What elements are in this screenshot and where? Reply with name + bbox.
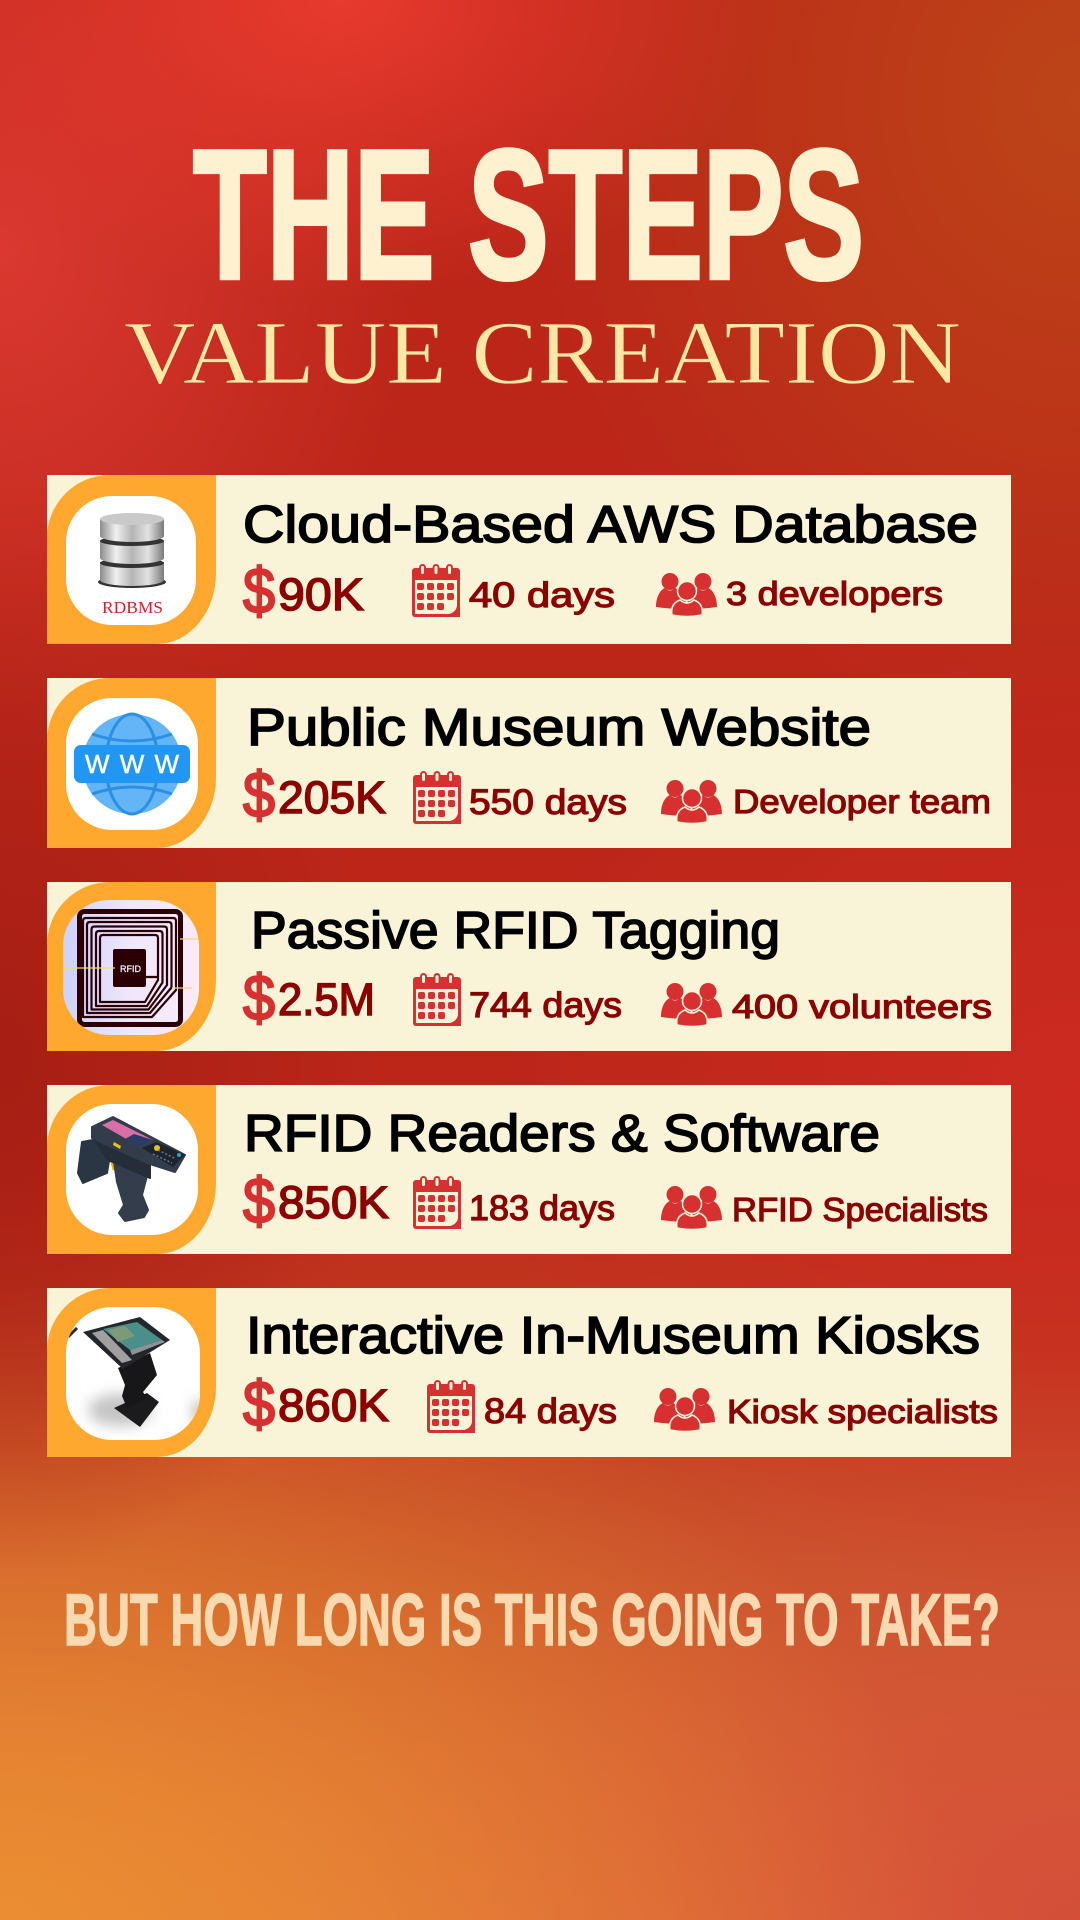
cost bbox=[243, 962, 375, 1034]
duration: 744 days bbox=[469, 986, 622, 1025]
cost bbox=[243, 759, 386, 831]
cost: 860K bbox=[278, 1380, 389, 1431]
icon: people bbox=[661, 1186, 722, 1230]
team: RFID Specialists bbox=[732, 1191, 988, 1228]
icon: handheld RFID reader bbox=[78, 1117, 185, 1221]
cost: $ bbox=[243, 555, 275, 627]
icon: RFID tag: RFID bbox=[120, 964, 141, 975]
panel: Public Museum Website bbox=[47, 678, 1011, 848]
icon: database: RDBMS bbox=[102, 598, 163, 617]
icon: touch kiosk bbox=[68, 1317, 207, 1427]
panel: Interactive In-Museum Kiosks bbox=[47, 1288, 1011, 1457]
team: 3 developers bbox=[726, 575, 943, 612]
team: Kiosk specialists bbox=[727, 1393, 998, 1430]
subtitle: VALUE CREATION bbox=[124, 304, 961, 403]
icon: globe www bbox=[74, 714, 190, 814]
cost bbox=[243, 1165, 389, 1237]
team: Developer team bbox=[733, 783, 991, 820]
icon: calendar bbox=[413, 1176, 461, 1229]
panel: Passive RFID Tagging bbox=[47, 882, 1011, 1051]
duration: 84 days bbox=[484, 1392, 617, 1431]
heading: Passive RFID Tagging bbox=[251, 902, 780, 960]
icon: RFID tag bbox=[63, 900, 199, 1035]
cost: $ bbox=[243, 962, 275, 1034]
icon: calendar bbox=[412, 564, 460, 617]
cost: $ bbox=[243, 1165, 275, 1237]
panel: Cloud-Based AWS Database bbox=[47, 475, 1011, 644]
cost: 2.5M bbox=[278, 974, 375, 1025]
icon: people bbox=[661, 983, 722, 1026]
icon: people bbox=[654, 1388, 715, 1432]
cost: 205K bbox=[278, 772, 386, 823]
icon: calendar bbox=[413, 771, 461, 824]
icon: globe www: WWW bbox=[85, 749, 179, 779]
icon: database bbox=[98, 513, 166, 617]
heading: Cloud-Based AWS Database bbox=[243, 496, 978, 554]
cost: 850K bbox=[278, 1177, 389, 1228]
duration: 183 days bbox=[469, 1189, 615, 1228]
panel: RFID Readers & Software bbox=[47, 1085, 1011, 1254]
duration: 40 days bbox=[469, 576, 615, 615]
cost: 90K bbox=[278, 569, 364, 620]
icon: calendar bbox=[427, 1380, 475, 1433]
icon: calendar bbox=[413, 973, 461, 1026]
cost: $ bbox=[243, 1368, 275, 1440]
heading: Interactive In-Museum Kiosks bbox=[246, 1307, 980, 1365]
icon: people bbox=[661, 780, 722, 824]
cost bbox=[243, 1368, 389, 1440]
heading: RFID Readers & Software bbox=[244, 1105, 880, 1163]
heading: Public Museum Website bbox=[247, 699, 871, 757]
cost: $ bbox=[243, 759, 275, 831]
cost bbox=[243, 555, 364, 627]
duration: 550 days bbox=[469, 783, 627, 822]
team: 400 volunteers bbox=[732, 988, 992, 1025]
icon: people bbox=[656, 573, 717, 616]
